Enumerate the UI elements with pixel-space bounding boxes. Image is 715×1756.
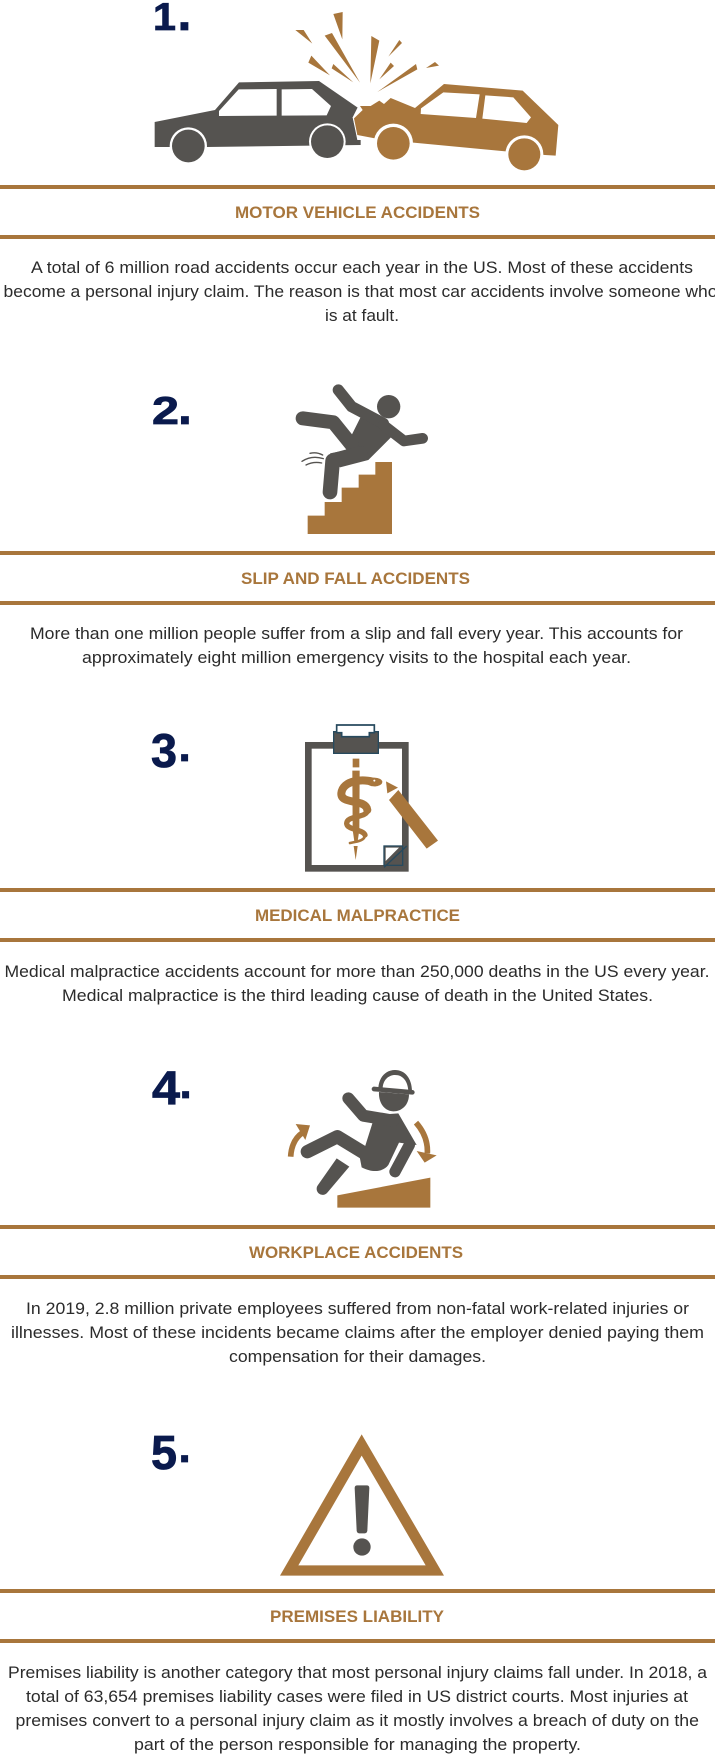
number 3: 3	[151, 724, 177, 777]
heading: SLIP AND FALL ACCIDENTS	[241, 570, 470, 588]
rule	[0, 551, 715, 555]
body text	[11, 1300, 704, 1366]
body text: Medical malpractice accidents account for more than 250,000 deaths in the US every year.	[4, 963, 710, 981]
body text: In 2019, 2.8 million private employees suffered from non-fatal work-related injuries or	[26, 1300, 690, 1318]
heading: MOTOR VEHICLE ACCIDENTS	[235, 204, 480, 222]
rule	[0, 1589, 715, 1593]
number 4	[152, 1059, 192, 1114]
body text	[4, 259, 715, 325]
body text: Premises liability is another category that most personal injury claims fall under. In 2018, a	[8, 1664, 708, 1682]
body text: part of the person responsible for managing the property.	[134, 1736, 581, 1754]
body text	[4, 963, 710, 1005]
rule	[0, 1639, 715, 1643]
rule	[0, 1275, 715, 1279]
body text: Medical malpractice is the third leading cause of death in the United States.	[62, 987, 653, 1005]
number 2: .	[178, 379, 192, 435]
number 5: .	[178, 1423, 191, 1472]
body text: illnesses. Most of these incidents became claims after the employer denied paying them	[11, 1324, 704, 1342]
number 5: 5	[151, 1427, 177, 1480]
body text: become a personal injury claim. The reason is that most car accidents involve someone who	[4, 283, 715, 301]
section 5: premises liability	[0, 1423, 715, 1754]
icon: person falling on stairs	[302, 390, 423, 534]
icon: warning triangle	[280, 1434, 444, 1576]
heading: WORKPLACE ACCIDENTS	[249, 1244, 463, 1262]
body text: total of 63,654 premises liability cases were filed in US district courts. Most injuries at	[26, 1688, 688, 1706]
number 3: .	[178, 722, 191, 771]
heading: PREMISES LIABILITY	[270, 1608, 444, 1626]
body text: A total of 6 million road accidents occur each year in the US. Most of these accidents	[31, 259, 693, 277]
icon: worker slipping on ramp	[291, 1070, 437, 1208]
number 3	[151, 722, 191, 777]
rule	[0, 938, 715, 942]
section 4: workplace accidents	[0, 1059, 715, 1366]
body text	[30, 625, 684, 667]
icon: car collision	[155, 12, 558, 173]
number 4: 4	[152, 1061, 180, 1114]
section 1: motor vehicle accidents	[0, 0, 715, 325]
body text: is at fault.	[325, 307, 399, 325]
number 5	[151, 1423, 191, 1480]
rule	[0, 888, 715, 892]
body text: premises convert to a personal injury claim as it mostly involves a breach of duty on the	[16, 1712, 699, 1730]
section 2: slip and fall accidents	[0, 379, 715, 667]
body text: approximately eight million emergency visits to the hospital each year.	[82, 649, 631, 667]
body text	[8, 1664, 708, 1754]
number 4: .	[180, 1059, 192, 1108]
number 2: 2	[152, 390, 179, 433]
icon: clipboard with medical staff and pencil	[308, 725, 438, 868]
section 3: medical malpractice	[0, 722, 715, 1005]
rule	[0, 235, 715, 239]
body text: More than one million people suffer from a slip and fall every year. This accounts for	[30, 625, 684, 643]
number 1	[153, 0, 191, 41]
rule	[0, 185, 715, 189]
number 2	[152, 379, 192, 435]
rule	[0, 1225, 715, 1229]
heading: MEDICAL MALPRACTICE	[255, 907, 460, 925]
body text: compensation for their damages.	[229, 1348, 486, 1366]
rule	[0, 601, 715, 605]
